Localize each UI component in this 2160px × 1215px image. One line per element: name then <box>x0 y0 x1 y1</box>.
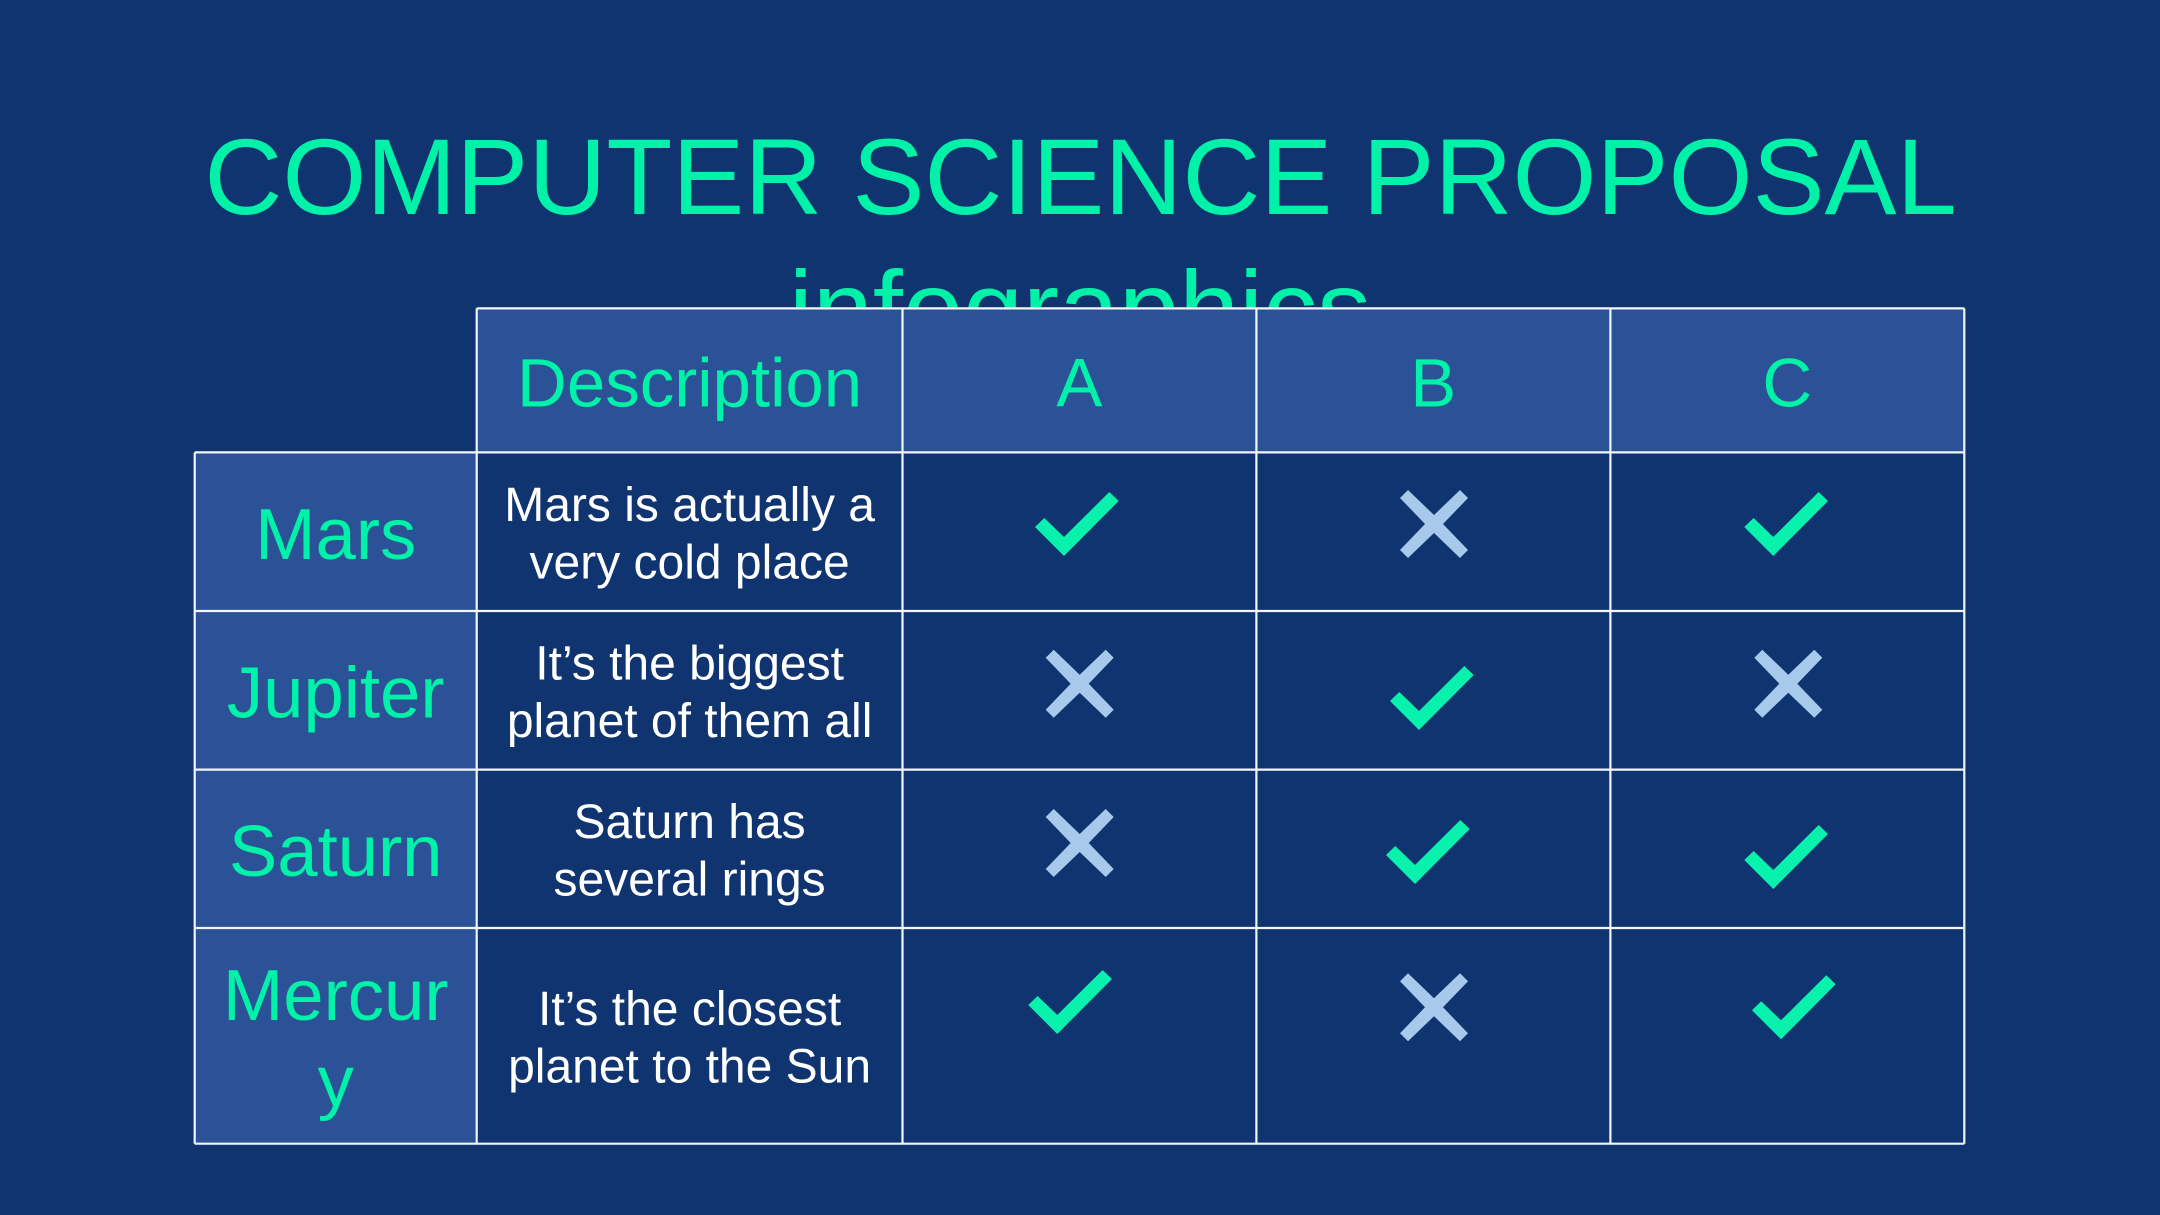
description: Saturn: several rings <box>554 854 826 906</box>
table grid lines <box>195 308 1964 1144</box>
icon: check, Mars A <box>1035 492 1119 556</box>
icon: check, Saturn C <box>1744 825 1828 889</box>
icon: check, Mercury C <box>1752 975 1836 1039</box>
description: Mercury <box>508 983 871 1093</box>
icon: check, Jupiter B <box>1390 666 1474 730</box>
description: Mars: Mars is actually a <box>504 479 875 532</box>
table fills: body cells <box>477 452 1964 1144</box>
icon: cross, Saturn A <box>1046 809 1114 877</box>
icon: check, Mars C <box>1744 492 1828 556</box>
description: Saturn <box>554 796 826 906</box>
description: Mars: very cold place <box>530 536 850 590</box>
table <box>195 308 1964 1144</box>
title: COMPUTER SCIENCE PROPOSAL <box>204 116 1957 237</box>
icon: cross, Mercury B <box>1400 973 1468 1041</box>
header: B: B <box>1410 344 1456 422</box>
header: A: A <box>1056 344 1102 422</box>
row label: Mercury: y <box>318 1041 355 1122</box>
icon: cross, Jupiter C <box>1754 650 1822 718</box>
icon: cross, Jupiter A <box>1046 650 1114 718</box>
description: Jupiter: It’s the biggest <box>535 638 844 691</box>
description: Mercury: It’s the closest <box>538 983 841 1036</box>
description: Mercury: planet to the Sun <box>508 1040 871 1093</box>
description: Mars <box>504 479 875 590</box>
header: C: C <box>1762 344 1812 422</box>
table fills: header row <box>477 308 1964 452</box>
description: Jupiter: planet of them all <box>507 695 872 748</box>
description: Saturn: Saturn has <box>574 796 806 849</box>
row label: Mercury <box>223 955 448 1122</box>
table fills: planet column <box>195 452 477 1144</box>
row label: Mars: Mars <box>255 494 416 575</box>
icon: check, Mercury A <box>1028 970 1112 1034</box>
description: Jupiter <box>507 638 872 748</box>
title: infographics <box>789 248 1371 369</box>
row label: Saturn: Saturn <box>229 811 443 892</box>
row label: Mercury: Mercur <box>223 955 448 1036</box>
title <box>204 116 1957 369</box>
icon: check, Saturn B <box>1386 820 1470 884</box>
icon: cross, Mars B <box>1400 490 1468 558</box>
header: Description: Description <box>517 344 862 422</box>
row label: Jupiter: Jupiter <box>227 652 445 734</box>
